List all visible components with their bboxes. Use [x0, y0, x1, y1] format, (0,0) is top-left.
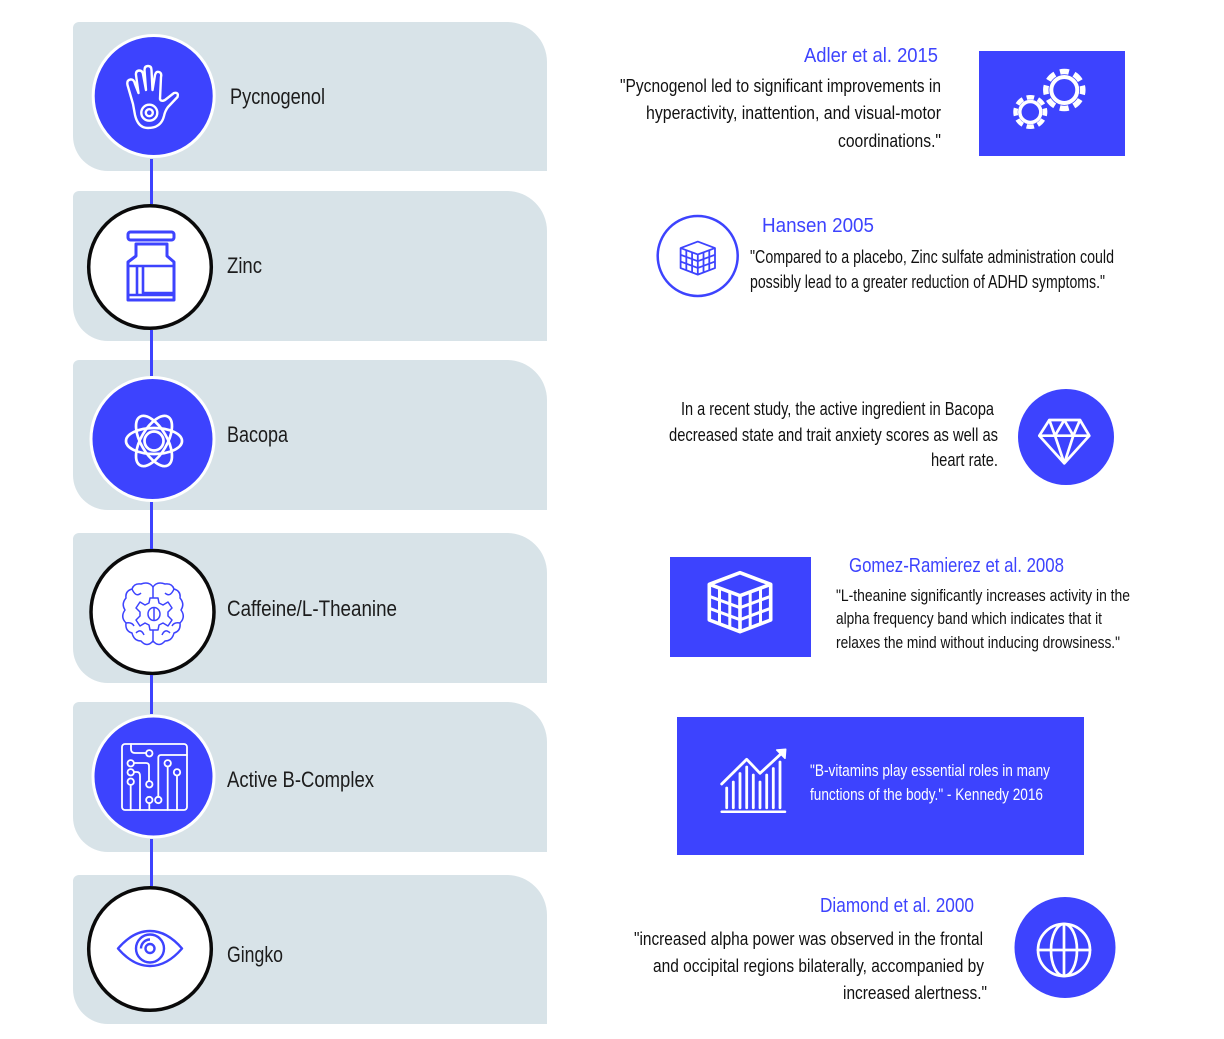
- label: Bacopa: Bacopa: [227, 422, 289, 447]
- quote: Gomez-Ramierez: [836, 586, 1130, 652]
- block: Adler et al. 2015: [620, 45, 1125, 156]
- quote: Adler: coordinations.": [838, 131, 941, 151]
- panel: Gingko background: [73, 875, 547, 1024]
- icon: brain with gear in white circle: [91, 550, 214, 674]
- block: Gomez-Ramierez et al. 2008: [670, 555, 1130, 657]
- quote: Bacopa: decreased state and trait anxiety scores as well as: [669, 425, 998, 445]
- panel: Bacopa background: [73, 360, 547, 510]
- icon: gears on blue rectangle: [979, 51, 1125, 156]
- heading: Adler: Adler et al. 2015: [804, 45, 938, 67]
- quote: Gomez-Ramierez: relaxes the mind without inducing drowsiness.": [836, 633, 1120, 652]
- row: Caffeine/L-Theanine: [73, 533, 547, 683]
- row: Gingko: [73, 875, 547, 1024]
- quote: Kennedy: "B-vitamins play essential roles in many: [810, 762, 1051, 780]
- panel: blue callout: [677, 717, 1084, 855]
- icon: diamond in blue circle: [1018, 389, 1114, 485]
- quote: Diamond: and occipital regions bilaterally, accompanied by: [653, 956, 984, 976]
- label: Gingko: Gingko: [227, 942, 283, 967]
- label: Caffeine/L-Theanine: Caffeine/L-Theanine: [227, 596, 397, 621]
- quote: Adler: hyperactivity, inattention, and visual-motor: [646, 103, 941, 123]
- label: Active B-Complex: Active B-Complex: [227, 767, 374, 792]
- quote: Bacopa: heart rate.: [931, 450, 998, 470]
- row: Pycnogenol: [73, 22, 547, 171]
- quote: Hansen: possibly lead to a greater reduction of ADHD symptoms.": [750, 272, 1105, 292]
- label: Pycnogenol: Pycnogenol: [230, 84, 325, 109]
- heading: Diamond: Diamond et al. 2000: [820, 895, 974, 917]
- icon: bottle in white circle: [89, 206, 211, 328]
- heading: Hansen: Hansen 2005: [762, 215, 874, 237]
- icon: rising bar chart: [722, 749, 786, 812]
- quote: Gomez-Ramierez: alpha frequency band which indicates that it: [836, 609, 1102, 628]
- panel: Active B-Complex background: [73, 702, 547, 852]
- quote: Diamond: "increased alpha power was observed in the frontal: [634, 929, 983, 949]
- quote: Diamond: increased alertness.": [843, 983, 987, 1003]
- row: Zinc: [73, 191, 547, 341]
- icon: cube on blue rectangle: [670, 557, 811, 657]
- row: Active B-Complex: [73, 702, 547, 852]
- icon: cube in outlined circle: [658, 216, 738, 296]
- block: Bacopa study: [669, 389, 1114, 485]
- block: Hansen 2005: [658, 215, 1114, 296]
- block: Diamond et al. 2000: [634, 895, 1116, 1003]
- heading: Gomez-Ramierez: Gomez-Ramierez et al. 2008: [849, 555, 1064, 577]
- quote: Diamond: [634, 929, 987, 1003]
- icon: eye in white circle: [89, 888, 211, 1010]
- quote: Hansen: "Compared to a placebo, Zinc sulfate administration could: [750, 247, 1114, 267]
- panel: Caffeine background: [73, 533, 547, 683]
- quote: Bacopa: In a recent study, the active ingredient in Bacopa: [681, 399, 995, 419]
- panel: Pycnogenol background: [73, 22, 547, 171]
- quote: Kennedy: [810, 762, 1051, 804]
- icon: circuit board in blue circle: [93, 716, 214, 837]
- quote: Adler: [620, 76, 941, 151]
- icon: atom in blue circle: [91, 378, 214, 500]
- block: Kennedy 2016 callout: [677, 717, 1084, 855]
- label: Zinc: Zinc: [227, 253, 262, 278]
- icon: globe in blue circle: [1014, 897, 1116, 998]
- quote: Kennedy: functions of the body." - Kennedy 2016: [810, 786, 1043, 804]
- quote: Adler: "Pycnogenol led to significant improvements in: [620, 76, 941, 96]
- quote: Hansen: [750, 247, 1114, 292]
- panel: Zinc background: [73, 191, 547, 341]
- icon: hand in blue circle: [93, 36, 214, 156]
- timeline connectors: [150, 159, 153, 886]
- quote: Bacopa: [669, 399, 998, 470]
- row: Bacopa: [73, 360, 547, 510]
- quote: Gomez-Ramierez: "L-theanine significantly increases activity in the: [836, 586, 1130, 605]
